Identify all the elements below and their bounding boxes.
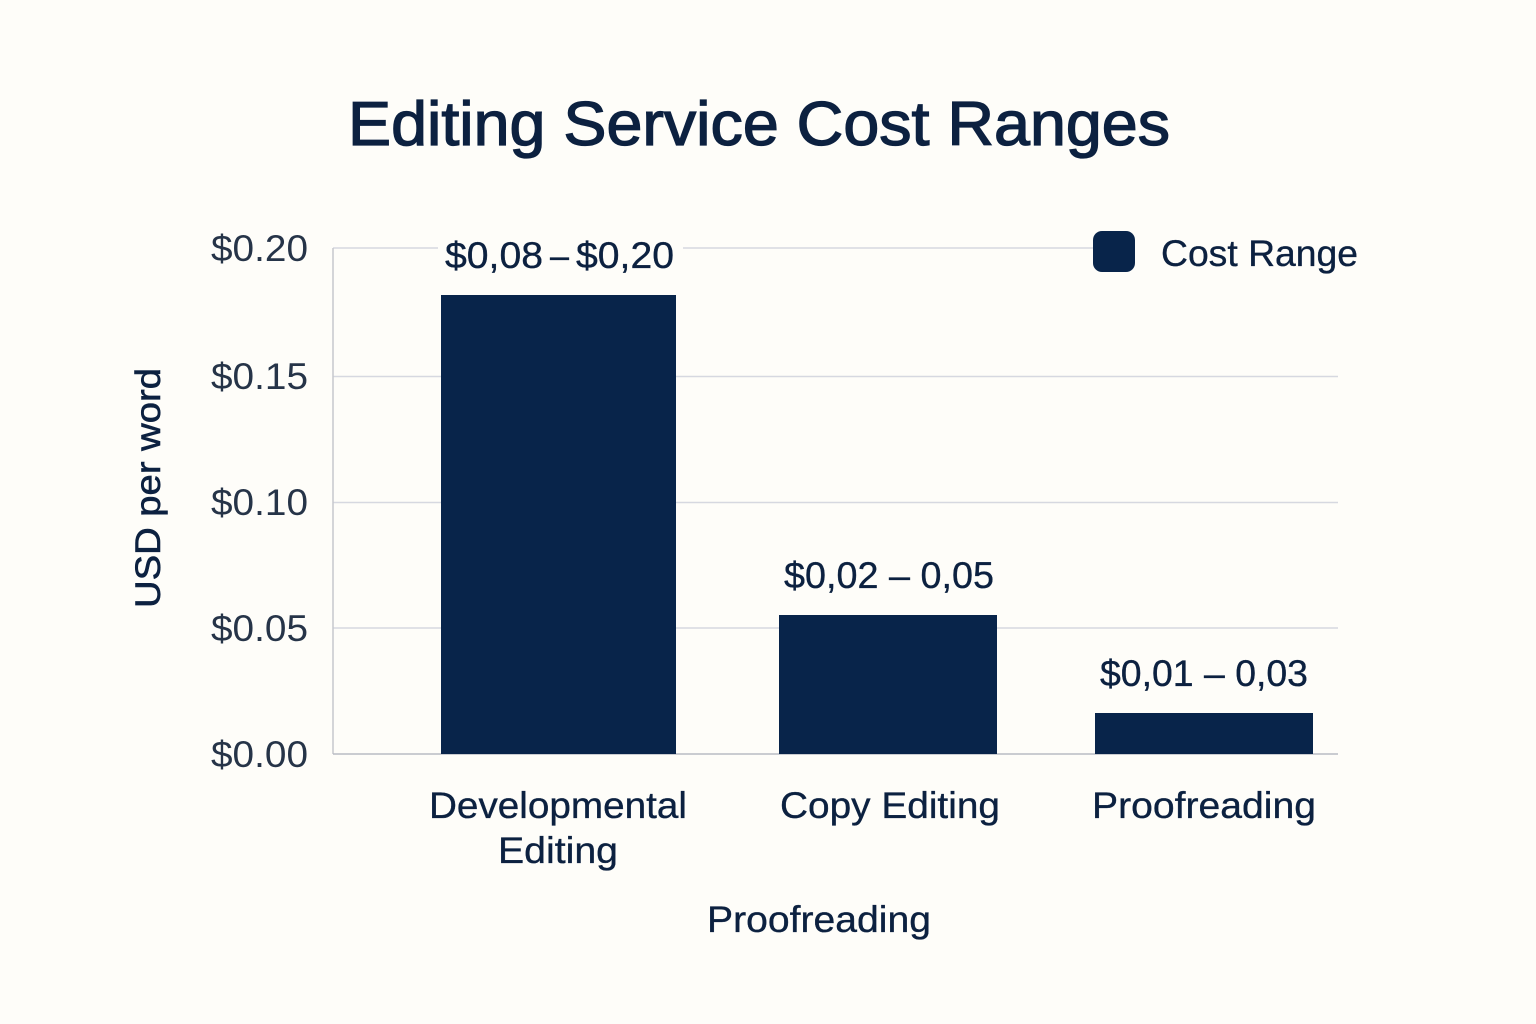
y axis tick labels: $0.20 (211, 228, 308, 269)
value labels: $0,20 (576, 235, 674, 276)
x axis title: Proofreading (707, 899, 931, 940)
legend swatch (1093, 231, 1135, 272)
value labels: $0,08 (445, 235, 543, 276)
y axis tick labels: $0.05 (211, 608, 308, 649)
y axis tick labels: $0.15 (211, 356, 308, 397)
bars (441, 295, 1313, 754)
value labels: $0,01 – 0,03 (1100, 653, 1308, 694)
category labels (429, 785, 1316, 871)
bar: developmental editing (441, 295, 676, 754)
label mask (438, 232, 683, 272)
value labels: $0,02 – 0,05 (784, 555, 994, 596)
y axis tick labels (211, 228, 308, 775)
value labels (445, 235, 1308, 694)
category labels: Proofreading (1092, 785, 1316, 826)
y axis title: USD per word (129, 368, 168, 608)
legend label: Cost Range (1161, 233, 1358, 274)
bar: proofreading (1095, 713, 1313, 754)
title: Editing Service Cost Ranges (348, 90, 1170, 159)
category labels: Editing (498, 830, 618, 871)
y axis tick labels: $0.10 (211, 482, 308, 523)
category labels: Developmental (429, 785, 687, 826)
category labels: Copy Editing (780, 785, 1000, 826)
legend (1093, 231, 1358, 274)
y axis tick labels: $0.00 (211, 734, 308, 775)
value labels: – (550, 235, 569, 276)
bar: copy editing (779, 615, 997, 754)
